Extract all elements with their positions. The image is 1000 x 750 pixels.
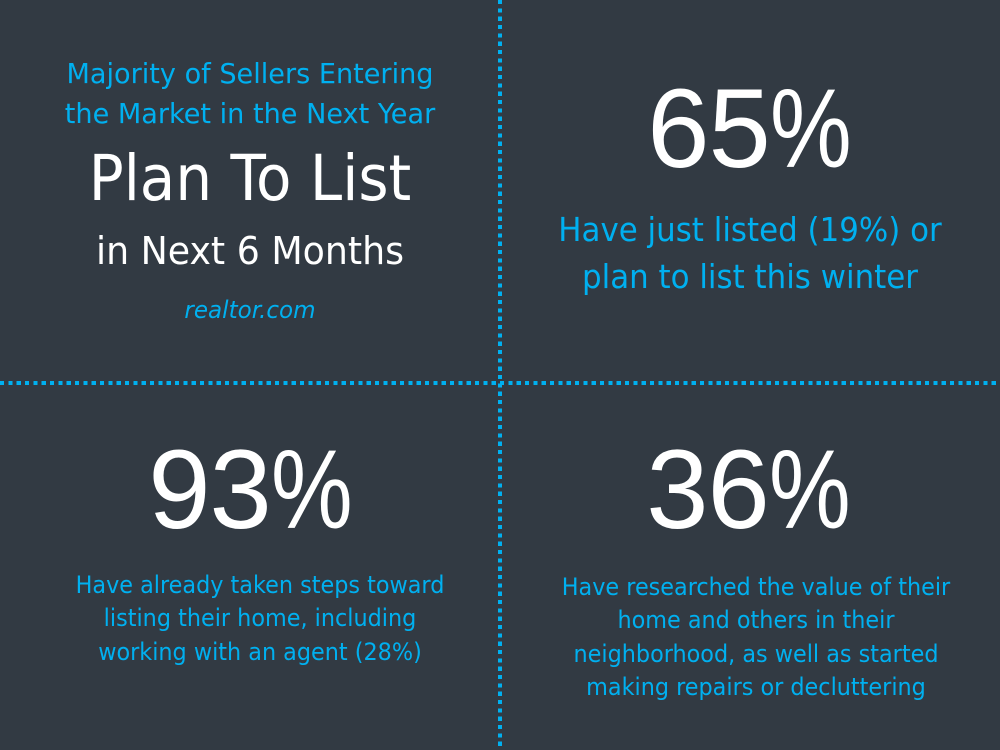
stat: 65%: 65 — [647, 66, 770, 191]
description: 65% — [558, 210, 942, 296]
description: 36%: Have researched the value of their — [562, 572, 950, 600]
description: 93% — [76, 570, 444, 666]
description: 93%: listing their home, including — [104, 604, 416, 632]
panel: 36 percent — [562, 427, 950, 701]
stat: 36%: 36 — [646, 427, 769, 552]
stat: 93%: % — [271, 427, 352, 552]
description: 93%: working with an agent (28%) — [98, 638, 422, 666]
heading: majority of sellers: the Market in the Next Year — [65, 97, 435, 130]
description: 93%: Have already taken steps toward — [76, 570, 444, 598]
stat: 36% — [646, 427, 850, 552]
stat: 36%: % — [769, 427, 850, 552]
description: 65%: plan to list this winter — [582, 257, 918, 296]
description: 36%: making repairs or decluttering — [586, 673, 926, 701]
description: 65%: Have just listed (19%) or — [558, 210, 942, 249]
description: 36% — [562, 572, 950, 701]
panel: 65 percent — [558, 66, 942, 296]
panel: title — [65, 57, 436, 324]
stat: 65% — [647, 66, 851, 191]
heading: majority of sellers — [65, 57, 436, 130]
subheading: in next 6 months: in Next 6 Months — [96, 229, 404, 273]
stat: 93% — [148, 427, 352, 552]
source: realtor.com: realtor.com — [184, 296, 316, 324]
heading: plan to list: Plan To List — [89, 142, 411, 215]
stat: 93%: 93 — [148, 427, 271, 552]
description: 36%: neighborhood, as well as started — [574, 640, 938, 668]
vertical dotted divider — [498, 0, 502, 750]
stat: 65%: % — [770, 66, 851, 191]
horizontal dotted divider — [0, 381, 1000, 385]
panel: 93 percent — [76, 427, 444, 666]
description: 36%: home and others in their — [617, 606, 895, 634]
heading: majority of sellers: Majority of Sellers Entering — [67, 57, 433, 90]
